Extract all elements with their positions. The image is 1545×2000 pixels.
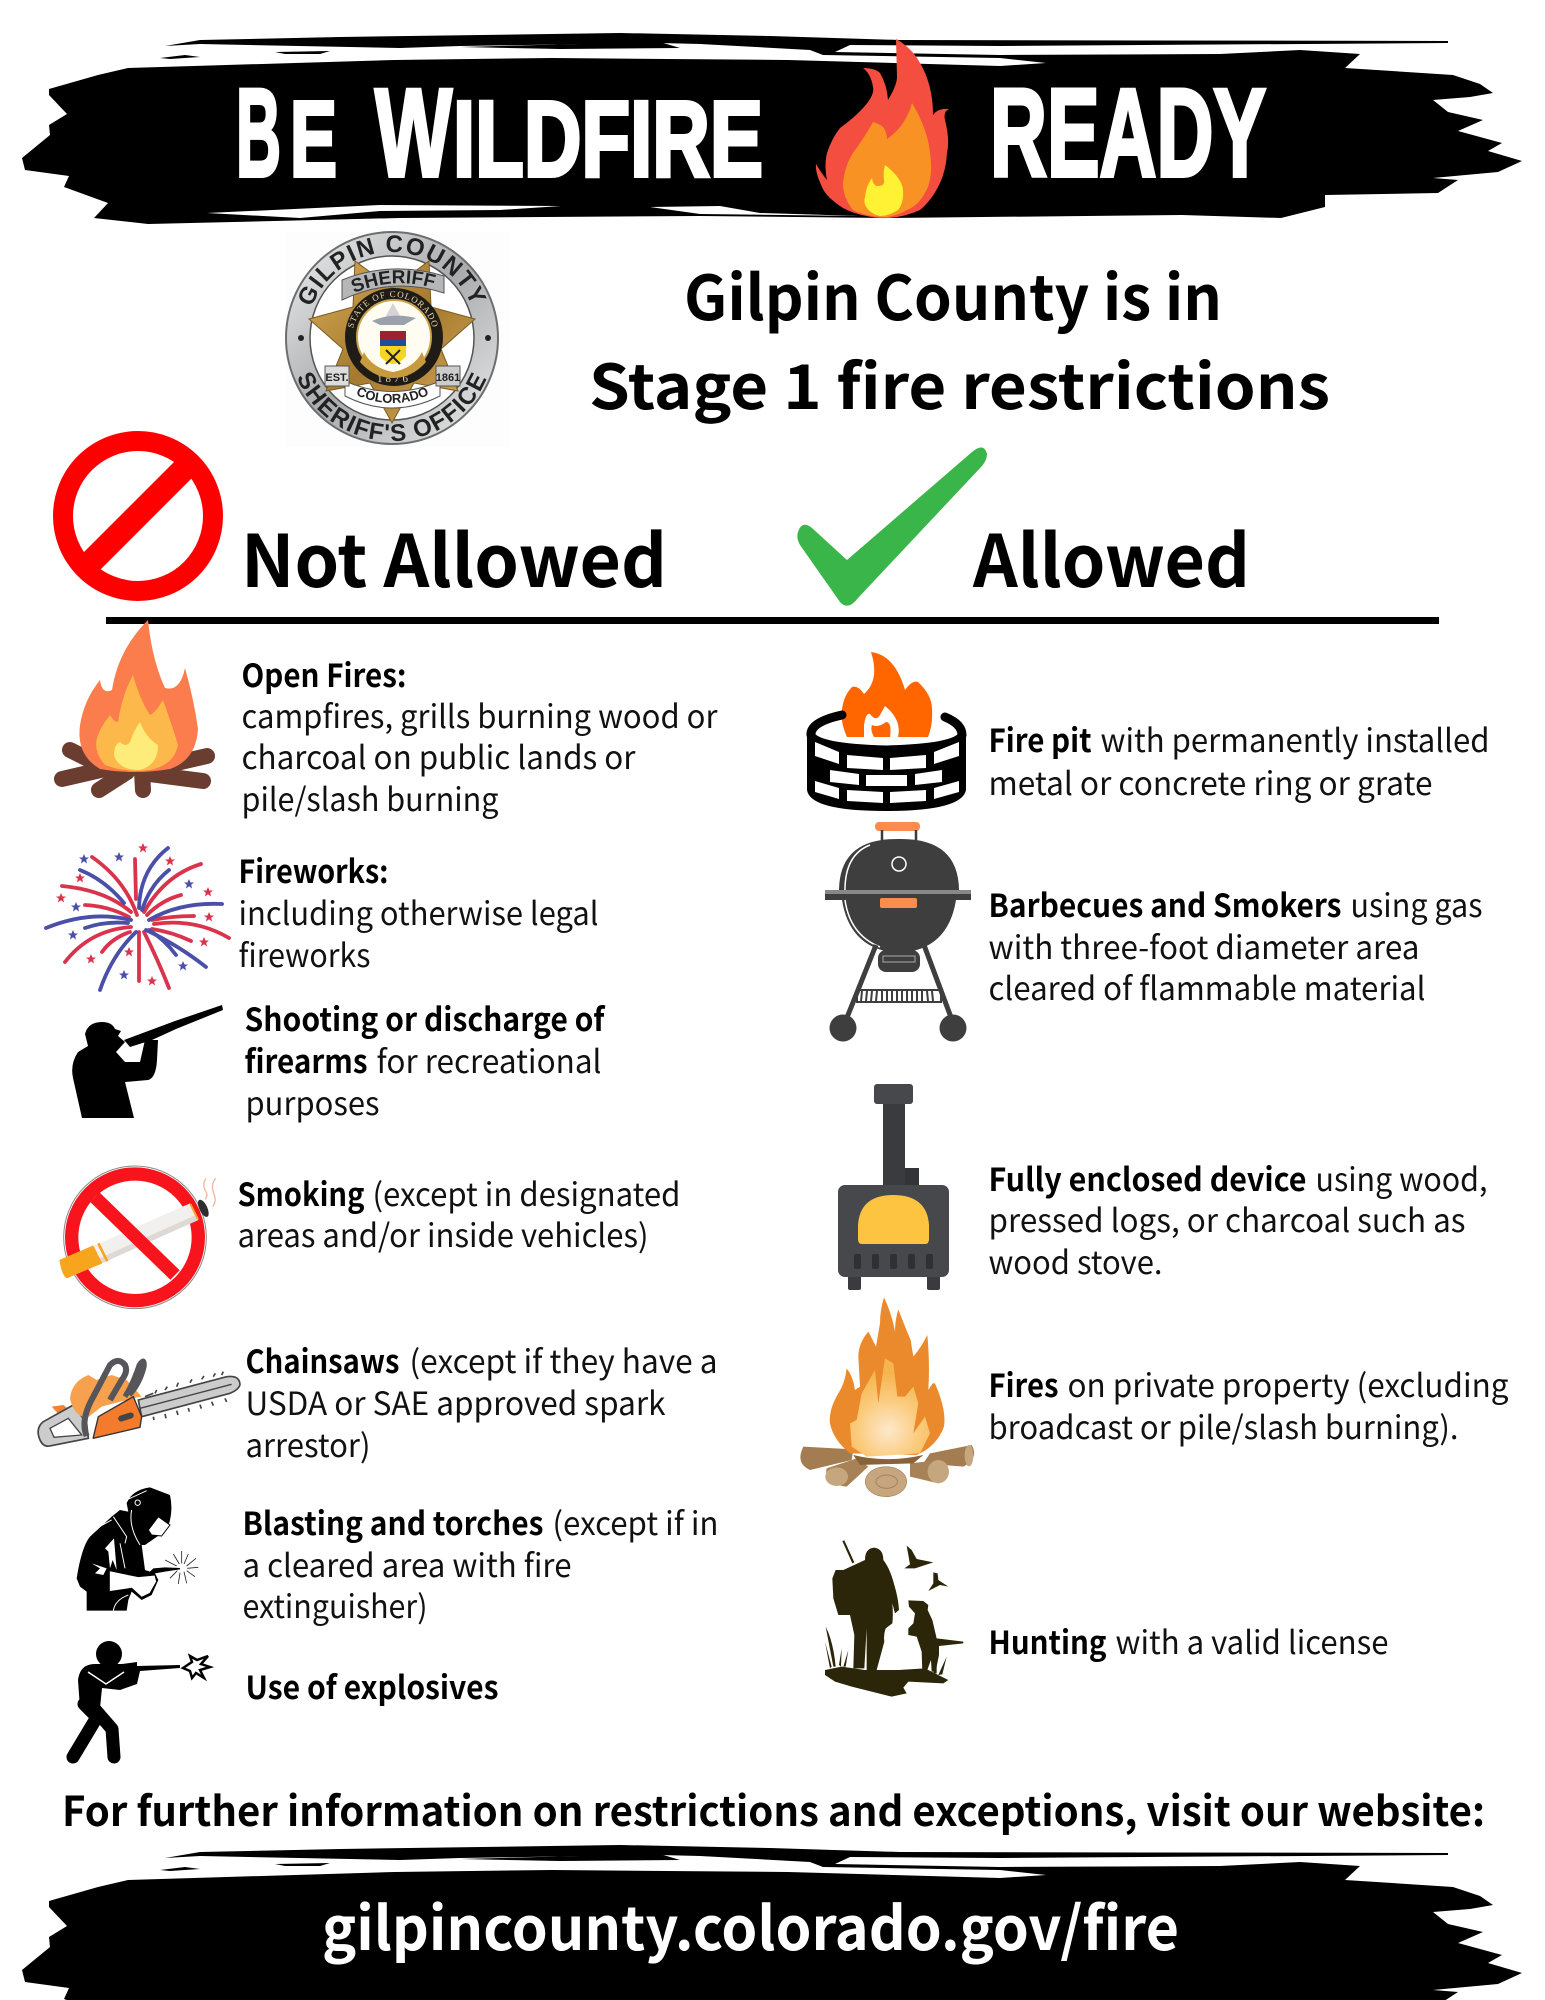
heading: Allowed: Allowed	[972, 503, 1250, 608]
text: enclosed device	[988, 1155, 1488, 1284]
text: open fires: Open Fires:	[242, 651, 406, 697]
text: fireworks: Fireworks:	[238, 847, 388, 893]
icon: green check mark	[797, 447, 987, 606]
icon: wood stove	[838, 1084, 949, 1290]
text: fires: Fires	[988, 1361, 1058, 1407]
icon: fire pit	[807, 652, 966, 811]
text: shooting	[244, 995, 606, 1125]
icon: campfire	[62, 620, 207, 790]
text: smoking: areas and/or inside vehicles)	[238, 1211, 648, 1257]
icon: flame	[816, 39, 949, 218]
text: chainsaws	[246, 1337, 718, 1467]
text: open fires: campfires, grills burning wood or	[242, 692, 718, 738]
text: shooting: Shooting or discharge of	[244, 995, 606, 1041]
title text left: B	[236, 64, 281, 203]
panel: title banner	[22, 33, 1522, 224]
text: shooting: for recreational	[376, 1037, 602, 1083]
icon: gun figure	[73, 1641, 210, 1757]
text: hunting: with a valid license	[1116, 1618, 1388, 1664]
text: fire pit: Fire pit	[988, 716, 1092, 762]
text: barbecues: using gas	[1350, 881, 1482, 927]
text: enclosed device: pressed logs, or charcoal such as	[988, 1196, 1466, 1242]
text: further information: For further information on restrictions and exceptions, visit our website:	[62, 1778, 1485, 1838]
icon: shooter silhouette	[72, 1005, 223, 1118]
icon: sheriff seal: 1861	[436, 372, 460, 384]
text: barbecues	[988, 881, 1482, 1010]
icon: hunter with dog	[825, 1540, 963, 1697]
text: open fires	[242, 651, 718, 821]
text: open fires: pile/slash burning	[242, 775, 498, 821]
text: chainsaws: (except if they have a	[410, 1337, 718, 1383]
text: blasting: (except if in	[552, 1499, 718, 1545]
text: enclosed device: Fully enclosed device	[988, 1155, 1306, 1201]
text: enclosed device: using wood,	[1316, 1155, 1488, 1201]
text: smoking: (except in designated	[372, 1170, 680, 1216]
heading: restriction status	[589, 248, 1330, 427]
icon: chainsaw	[38, 1361, 240, 1446]
icon: sheriff seal: EST.	[325, 372, 349, 384]
text: enclosed device: wood stove.	[988, 1238, 1162, 1284]
icon: sheriff seal: 1876	[377, 373, 411, 385]
text: chainsaws: USDA or SAE approved spark	[246, 1379, 666, 1425]
text: fire pit	[988, 716, 1490, 805]
title text left: ILDFIRE	[453, 78, 763, 199]
title text left: E	[290, 78, 337, 199]
heading: restriction status: Stage 1 fire restrictions	[589, 337, 1330, 427]
text: barbecues: with three-foot diameter area	[988, 923, 1420, 969]
icon: welder	[77, 1487, 198, 1611]
icon: sheriff seal: SHERIFF'S OFFICE	[298, 372, 486, 442]
panel: not allowed list	[38, 620, 718, 1757]
text: blasting: Blasting and torches	[242, 1499, 544, 1545]
text: fires: on private property (excluding	[1068, 1361, 1508, 1407]
text: blasting: extinguisher)	[242, 1582, 428, 1628]
text: fires	[988, 1361, 1508, 1449]
text: fireworks	[238, 847, 598, 977]
text: blasting	[242, 1499, 718, 1628]
heading: restriction status: Gilpin County is in	[684, 248, 1222, 338]
text: explosives: Use of explosives	[246, 1663, 498, 1709]
text: fires: broadcast or pile/slash burning).	[988, 1403, 1458, 1449]
heading: Not Allowed: Not Allowed	[241, 503, 667, 608]
divider rule	[106, 617, 1439, 624]
brush stroke background	[22, 1845, 1522, 2000]
panel: website banner	[22, 1845, 1522, 2000]
icon: fireworks	[46, 843, 229, 990]
icon: sheriff seal	[285, 231, 499, 445]
text: open fires: charcoal on public lands or	[242, 733, 636, 779]
icon: barbecue grill	[825, 822, 971, 1042]
text: fire pit: with permanently installed	[1100, 716, 1490, 762]
icon: prohibition sign	[63, 441, 213, 591]
text: smoking	[238, 1170, 680, 1257]
title text right: READY	[990, 64, 1266, 203]
sheriff banner: SHERIFF	[352, 270, 436, 292]
text: blasting: a cleared area with fire	[242, 1541, 572, 1587]
panel: allowed list	[800, 652, 1508, 1697]
text: barbecues: Barbecues and Smokers	[988, 881, 1342, 927]
website url: gilpincounty.colorado.gov/fire	[322, 1881, 1179, 1968]
colorado banner: COLORADO	[357, 388, 428, 404]
icon: watercolor campfire	[800, 1297, 974, 1497]
text: fireworks: including otherwise legal	[238, 889, 598, 935]
title text left: W	[375, 64, 452, 203]
text: chainsaws: Chainsaws	[246, 1337, 400, 1383]
text: smoking: Smoking	[238, 1170, 364, 1216]
text: shooting: purposes	[246, 1079, 380, 1125]
icon: no smoking	[59, 1166, 216, 1309]
text: barbecues: cleared of flammable material	[988, 964, 1426, 1010]
text: shooting: firearms	[244, 1037, 368, 1083]
text: hunting	[988, 1618, 1388, 1664]
text: hunting: Hunting	[988, 1618, 1106, 1664]
brush stroke background	[22, 33, 1522, 224]
title text left	[236, 64, 763, 203]
text: fire pit: metal or concrete ring or grate	[988, 759, 1432, 805]
icon: sheriff seal: STATE OF COLORADO	[348, 291, 438, 328]
colorado banner	[344, 382, 440, 408]
text: fireworks: fireworks	[238, 931, 370, 977]
icon: sheriff seal: GILPIN COUNTY	[299, 235, 487, 304]
text: chainsaws: arrestor)	[246, 1421, 370, 1467]
